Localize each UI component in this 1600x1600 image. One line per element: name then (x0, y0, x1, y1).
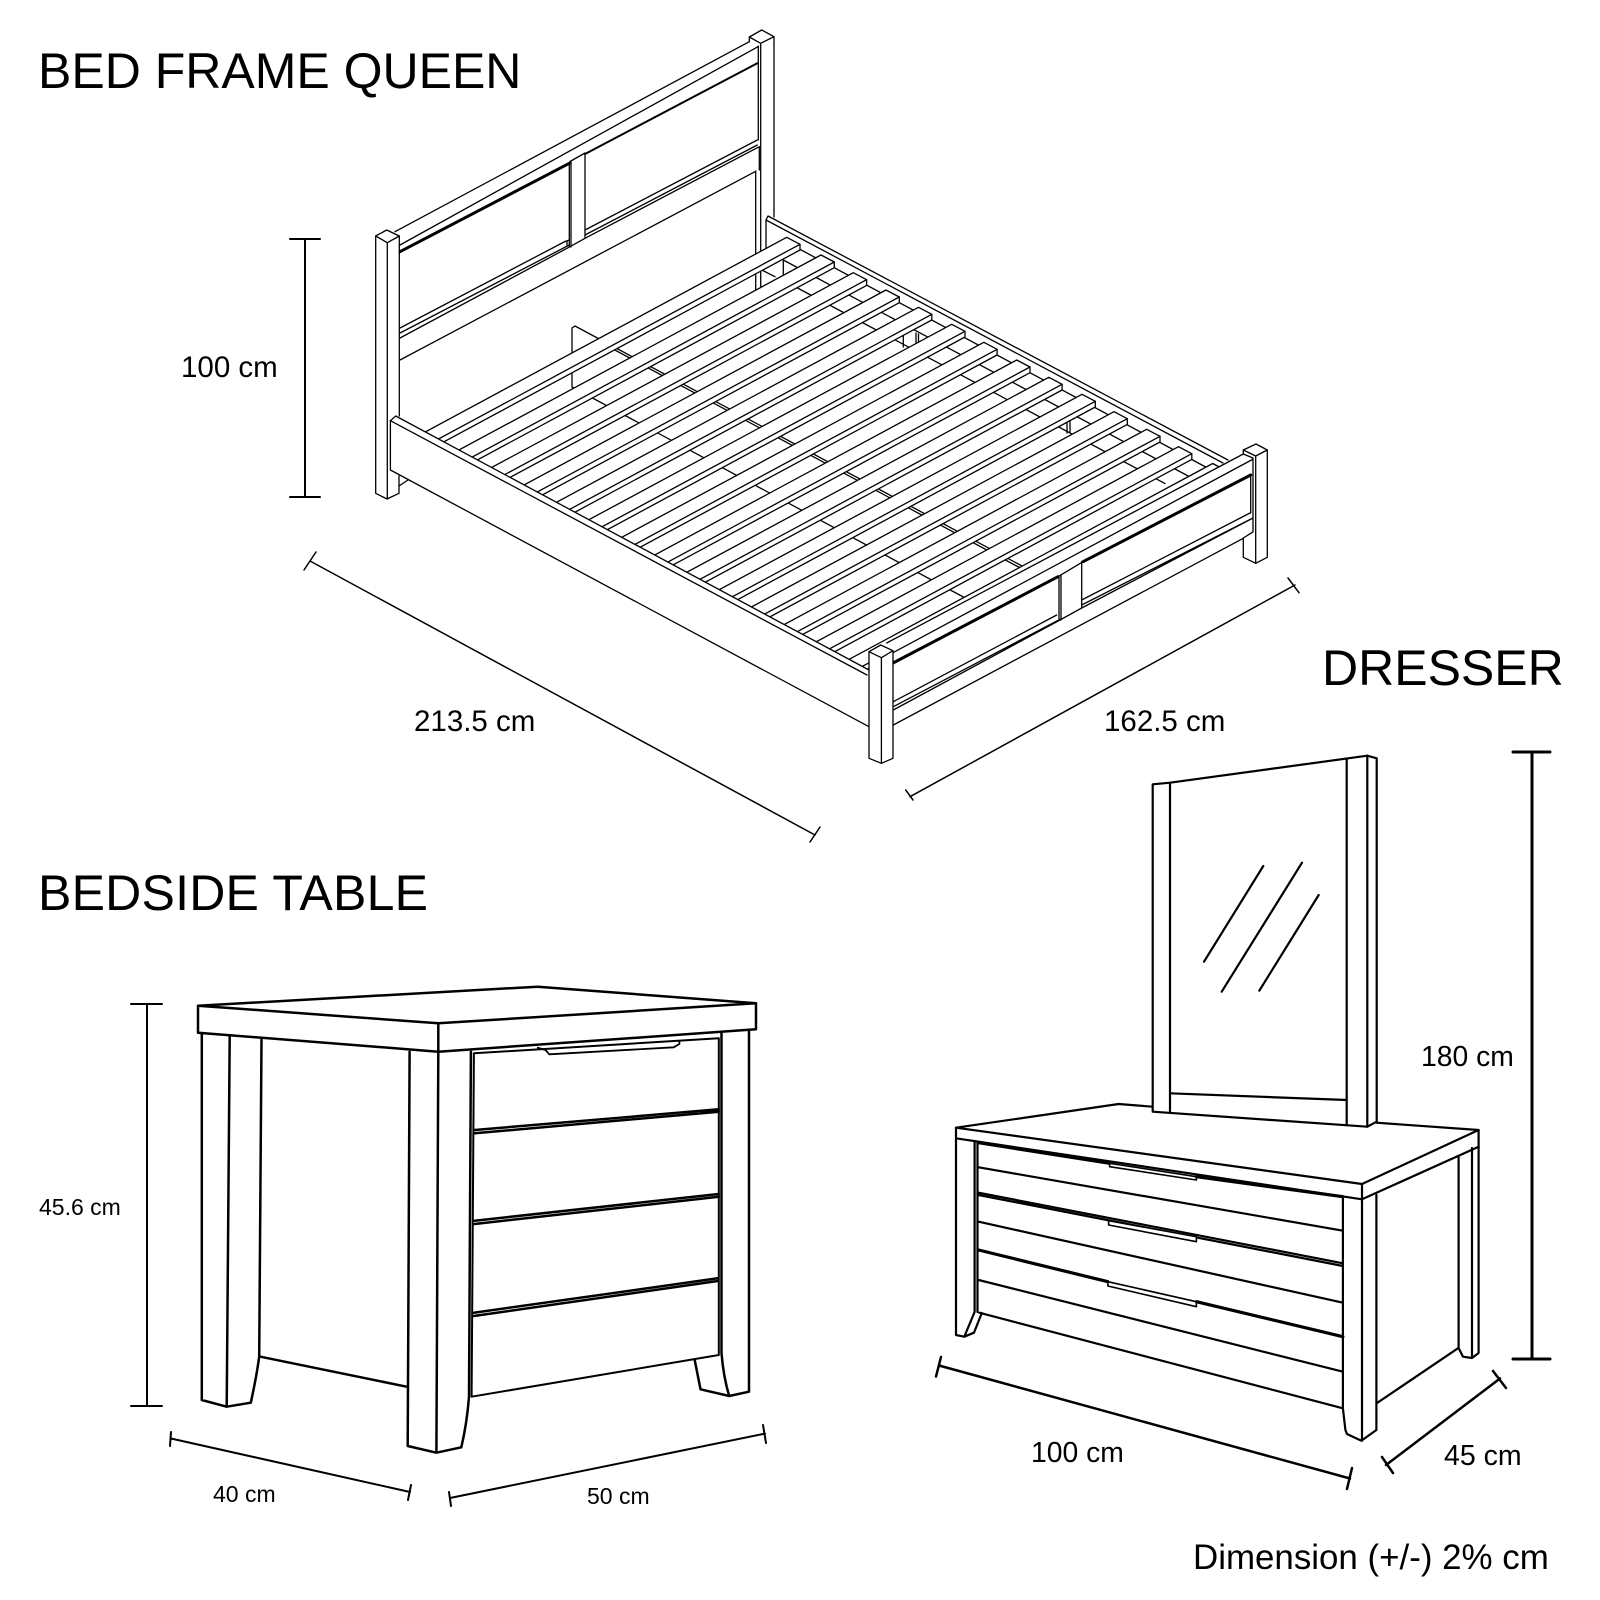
back left leg (202, 1033, 262, 1407)
table top (198, 987, 756, 1023)
dimension: bedside depth (170, 1432, 411, 1500)
illustration: bedside table (198, 987, 756, 1453)
dimension: dresser depth (1382, 1371, 1506, 1473)
illustration: queen bed frame (287, 30, 1267, 763)
dresser top (956, 1104, 1479, 1184)
drawer 3 (979, 1250, 1343, 1337)
dimension: dresser height (1513, 752, 1550, 1359)
title: bedside table: BEDSIDE TABLE (38, 865, 428, 921)
dimension: bed width (906, 578, 1299, 800)
drawer front outline (472, 1038, 719, 1397)
dimension: bedside height (131, 1004, 162, 1406)
illustration: dresser with mirror (956, 756, 1479, 1441)
slat 13 (816, 446, 1192, 652)
slat 2 (458, 254, 835, 460)
right leg (695, 1031, 749, 1396)
footboard (880, 454, 1253, 725)
side panel and back leg (1378, 1348, 1458, 1403)
slat 8 (654, 359, 1031, 565)
title: dresser: DRESSER (1322, 640, 1564, 696)
mirror glare (1204, 863, 1319, 992)
slat 14 (849, 462, 1219, 669)
label: 213.5 cm: 213.5 cm (414, 705, 535, 738)
drawer handle (538, 1042, 679, 1054)
label: 100 cm: 100 cm (1031, 1436, 1124, 1468)
note: dimension tolerance: Dimension (+/-) 2% cm (1193, 1538, 1549, 1577)
left leg (956, 1138, 982, 1337)
slat 4 (524, 289, 900, 495)
slat 1 (425, 236, 801, 442)
drawer 1 (979, 1143, 1343, 1197)
label: 45.6 cm: 45.6 cm (39, 1194, 121, 1220)
dimension: bed height (290, 239, 320, 497)
title: bed frame queen: BED FRAME QUEEN (38, 43, 521, 99)
side panel bottom (260, 1357, 407, 1387)
label: 50 cm: 50 cm (587, 1483, 650, 1509)
slat 7 (622, 342, 998, 548)
drawer 2 (979, 1193, 1343, 1266)
mirror (1153, 756, 1377, 1127)
front corner leg (1343, 1195, 1376, 1441)
dimension: bed length (304, 552, 820, 842)
slat 11 (751, 411, 1128, 617)
dimension: dresser width (936, 1357, 1352, 1489)
near side rail (390, 416, 869, 727)
slats and supports (425, 236, 1219, 669)
slat 12 (784, 428, 1161, 634)
slat 3 (492, 272, 868, 478)
far foot post (1243, 444, 1267, 563)
slat 10 (719, 394, 1096, 600)
headboard (376, 30, 774, 499)
slat 9 (687, 376, 1063, 582)
front corner leg (408, 1052, 471, 1453)
slat 5 (556, 306, 932, 512)
far side rail (766, 216, 1228, 463)
label: 180 cm: 180 cm (1421, 1040, 1514, 1072)
slat 6 (589, 324, 966, 530)
near foot post (869, 645, 893, 763)
dimension: bedside width (449, 1425, 766, 1506)
drawer separators (475, 1109, 719, 1133)
label: 45 cm: 45 cm (1444, 1440, 1522, 1472)
centre support and ledges (572, 244, 1215, 622)
label: 162.5 cm: 162.5 cm (1104, 705, 1225, 738)
label: 40 cm: 40 cm (213, 1481, 276, 1507)
label: 100 cm: 100 cm (181, 351, 278, 384)
